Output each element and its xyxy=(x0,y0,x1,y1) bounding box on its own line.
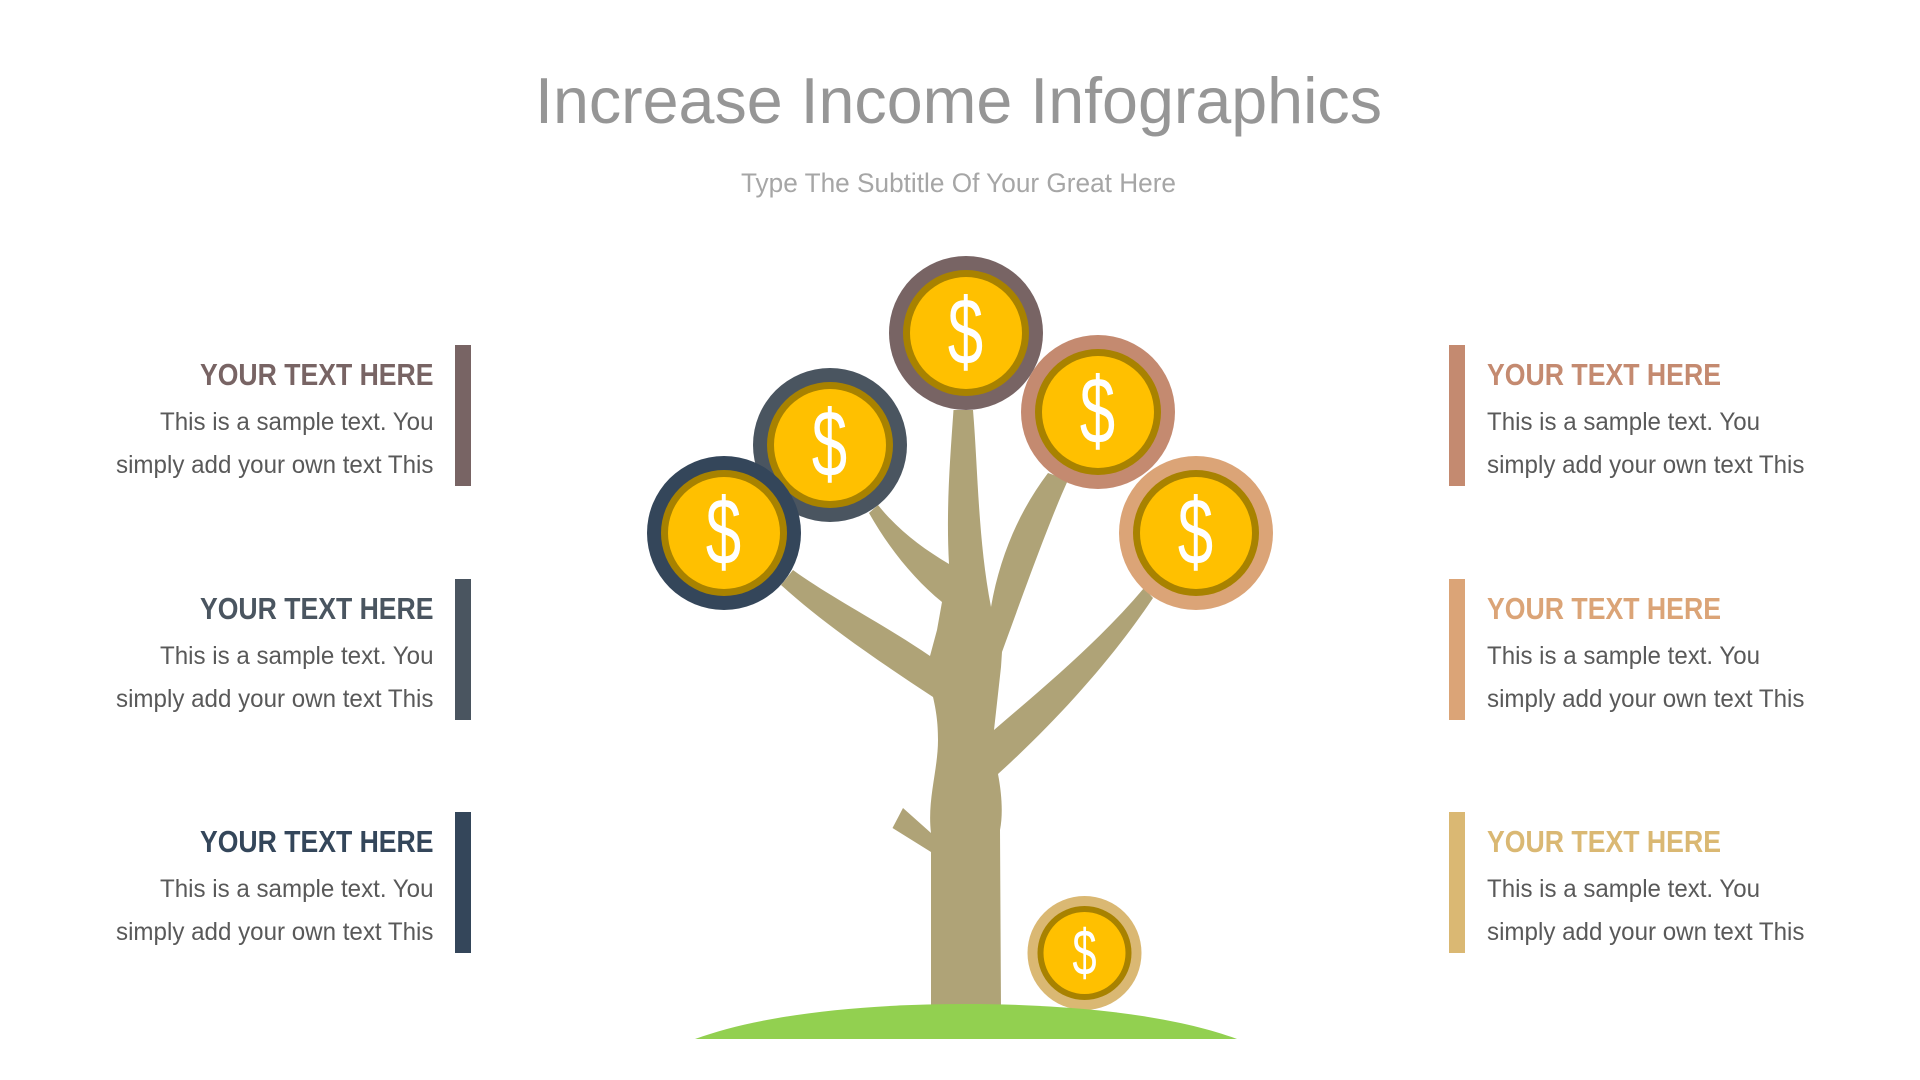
body text xyxy=(116,875,434,946)
panel: right text block 3 xyxy=(1449,812,1804,953)
coin: terracotta: $ xyxy=(1080,358,1115,464)
accent bar xyxy=(455,812,471,953)
title: Increase Income Infographics xyxy=(535,64,1382,137)
coin: brown top: $ xyxy=(948,279,983,385)
body text xyxy=(116,642,434,713)
heading: YOUR TEXT HERE xyxy=(200,591,434,626)
coin: brown top xyxy=(889,256,1043,410)
body text: This is a sample text. You xyxy=(160,642,434,670)
heading: YOUR TEXT HERE xyxy=(200,824,434,859)
panel: left text block 2 xyxy=(116,579,471,720)
body text: simply add your own text This xyxy=(1487,918,1804,946)
coin: small on ground: $ xyxy=(1072,916,1097,989)
body text xyxy=(1487,642,1804,713)
coin: tan xyxy=(1119,456,1273,610)
panel: right text block 1 xyxy=(1449,345,1804,486)
heading: YOUR TEXT HERE xyxy=(1487,357,1721,392)
coin: slate: $ xyxy=(812,391,847,497)
accent bar xyxy=(1449,345,1465,486)
accent bar xyxy=(455,345,471,486)
subtitle: Type The Subtitle Of Your Great Here xyxy=(741,168,1176,198)
body text: simply add your own text This xyxy=(116,451,434,479)
coin: terracotta xyxy=(1021,335,1175,489)
heading: YOUR TEXT HERE xyxy=(200,357,434,392)
panel: left text block 3 xyxy=(116,812,471,953)
body text: simply add your own text This xyxy=(116,685,434,713)
ground xyxy=(695,1004,1237,1039)
body text: This is a sample text. You xyxy=(160,875,434,903)
coin: small on ground xyxy=(1028,896,1142,1010)
body text: This is a sample text. You xyxy=(1487,408,1760,436)
body text: This is a sample text. You xyxy=(1487,875,1760,903)
coin: navy: $ xyxy=(706,479,741,585)
body text: simply add your own text This xyxy=(116,918,434,946)
body text: This is a sample text. You xyxy=(160,408,434,436)
heading: YOUR TEXT HERE xyxy=(1487,824,1721,859)
body text xyxy=(116,408,434,479)
accent bar xyxy=(455,579,471,720)
body text xyxy=(1487,408,1804,479)
body text xyxy=(1487,875,1804,946)
coin: tan: $ xyxy=(1178,479,1213,585)
coin: slate xyxy=(753,368,907,522)
body text: This is a sample text. You xyxy=(1487,642,1760,670)
coin: navy xyxy=(647,456,801,610)
accent bar xyxy=(1449,812,1465,953)
panel: right text block 2 xyxy=(1449,579,1804,720)
body text: simply add your own text This xyxy=(1487,685,1804,713)
body text: simply add your own text This xyxy=(1487,451,1804,479)
panel: left text block 1 xyxy=(116,345,471,486)
heading: YOUR TEXT HERE xyxy=(1487,591,1721,626)
tree trunk and branches xyxy=(781,410,1153,1010)
accent bar xyxy=(1449,579,1465,720)
